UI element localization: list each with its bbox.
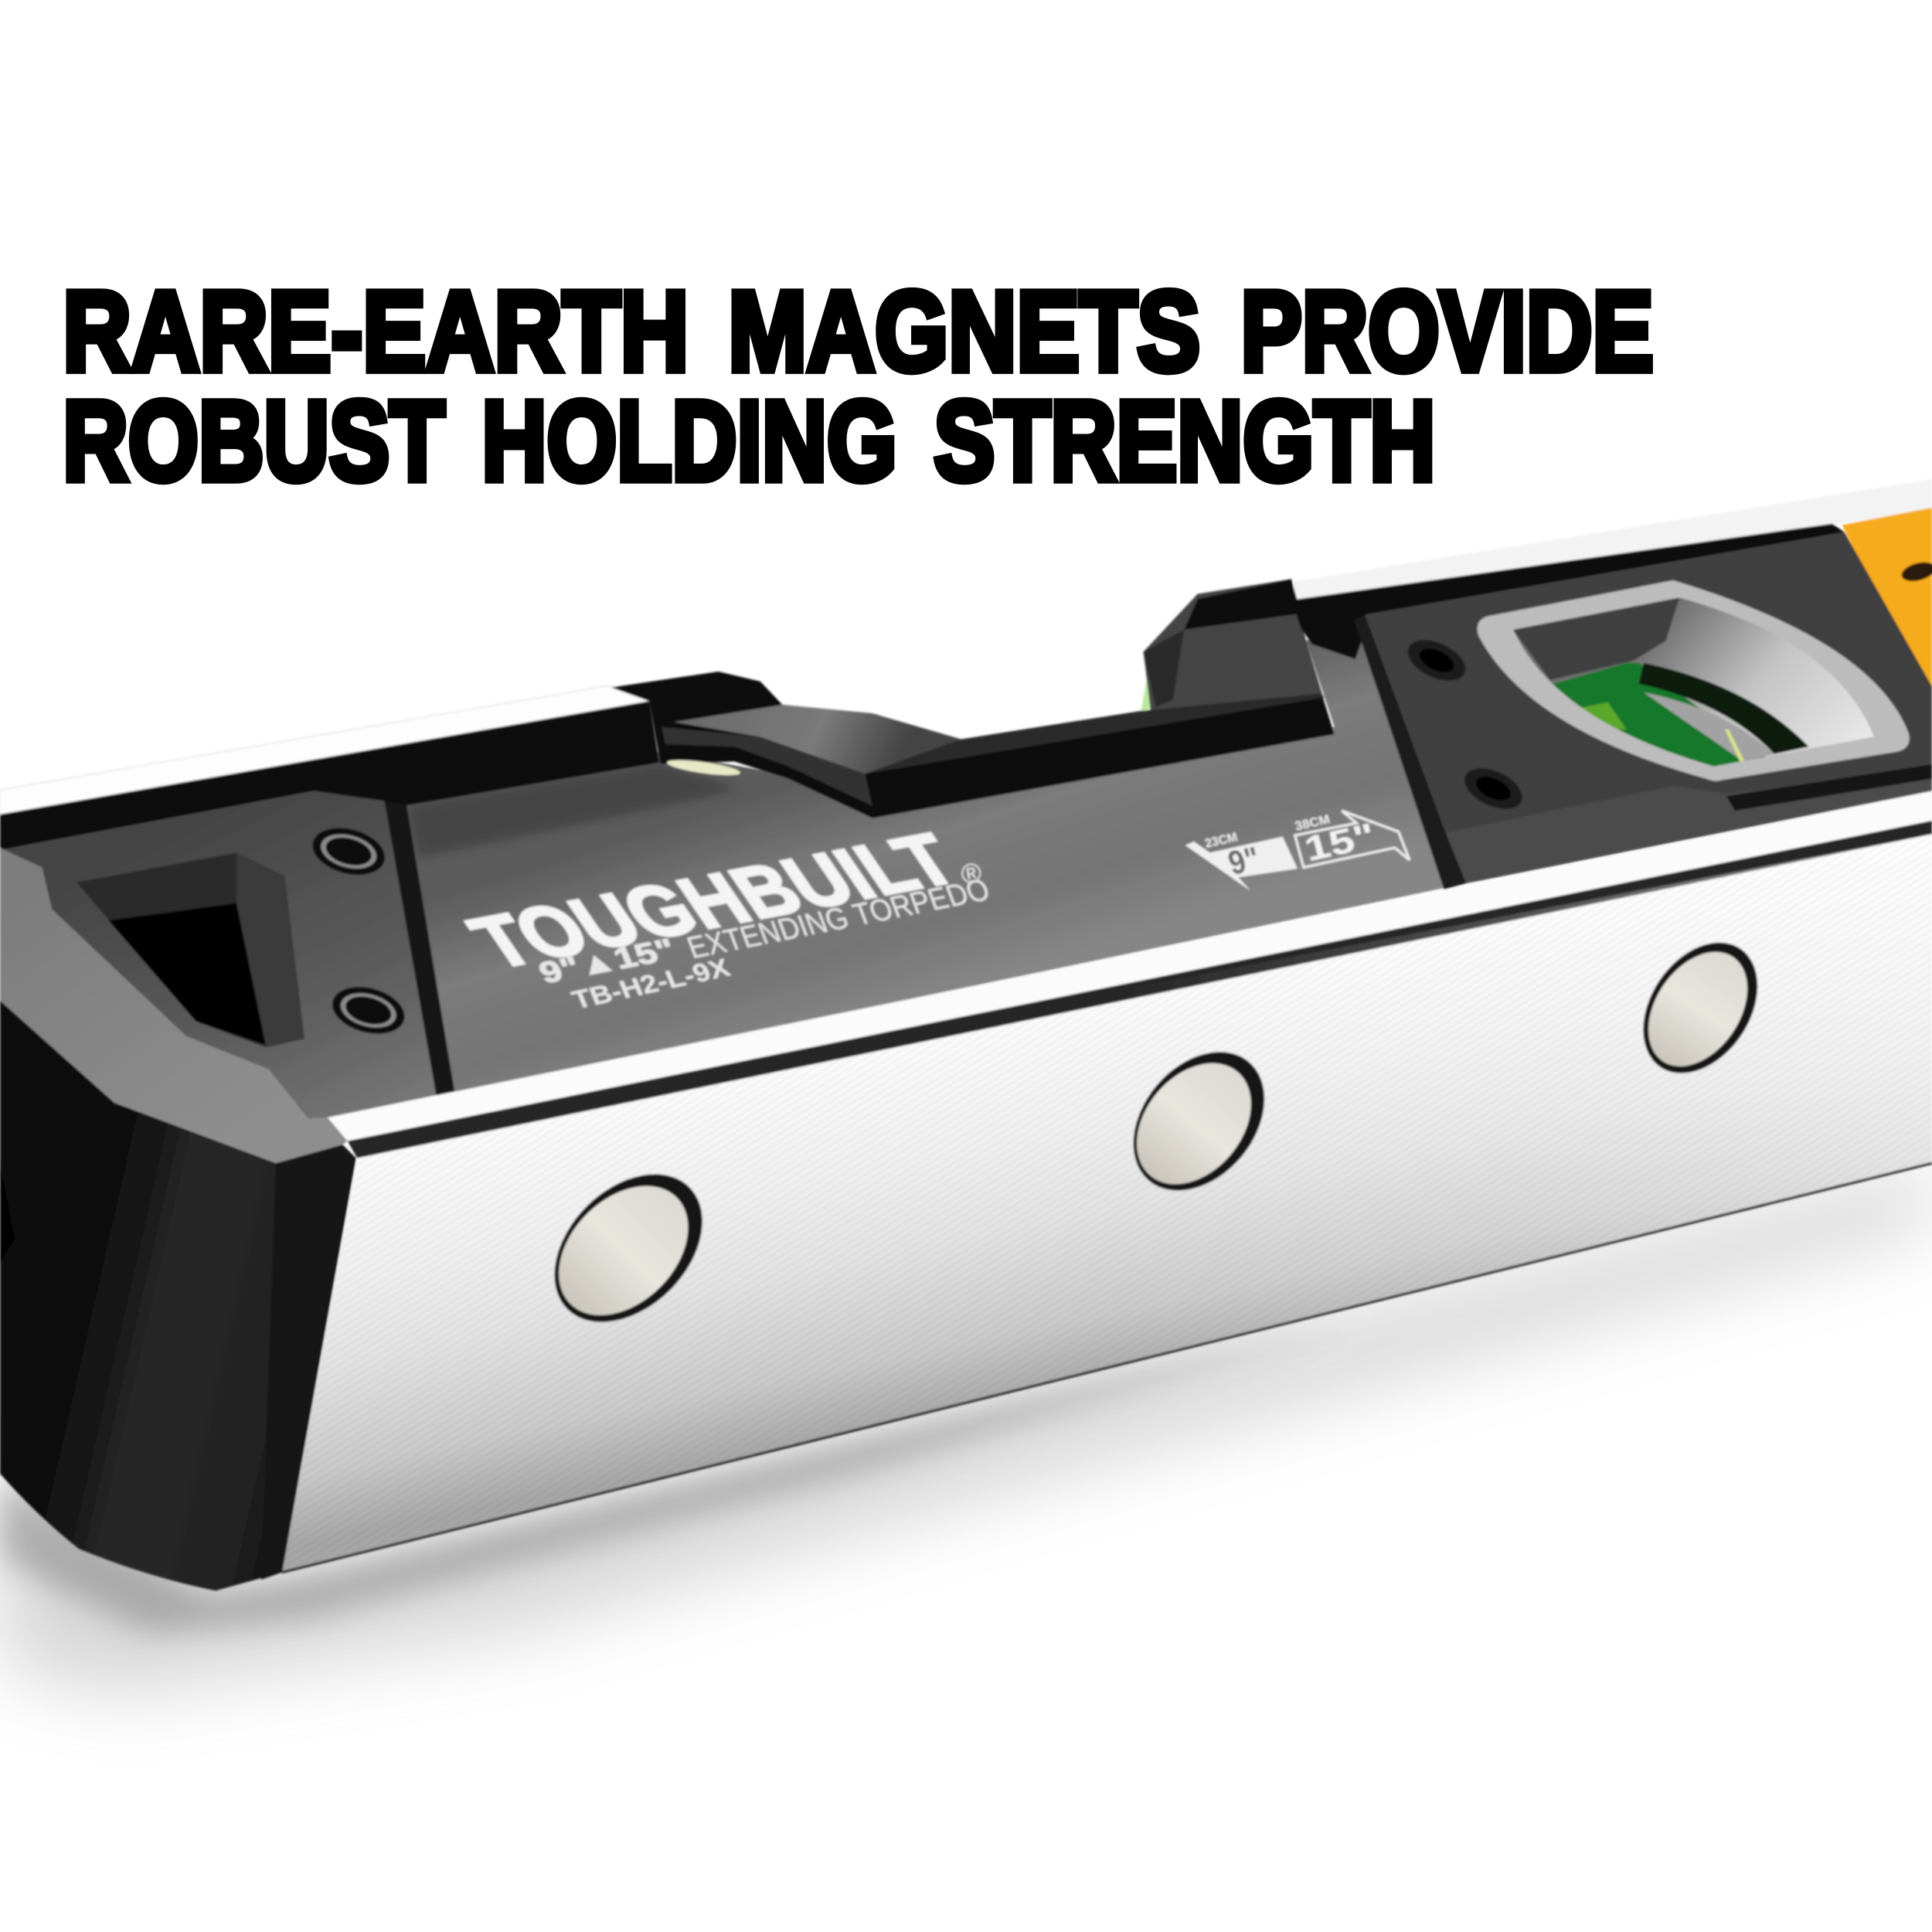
15 inch arrow: 38CM	[1294, 813, 1332, 834]
logo	[454, 818, 984, 983]
screw	[1401, 632, 1472, 689]
logo: TOUGHBUILT	[454, 818, 974, 983]
torpedo level	[0, 479, 1932, 1590]
extending bracket	[1141, 579, 1335, 734]
product description text: TB-H2-L-9X	[567, 953, 734, 1015]
screw	[327, 979, 410, 1041]
title: HOLDING	[481, 378, 897, 505]
vial window bezel	[1478, 580, 1910, 781]
title: STRENGTH	[934, 378, 1435, 505]
black groove stripe	[348, 821, 1932, 1158]
black end cap	[0, 1001, 356, 1590]
9 inch arrow	[1185, 831, 1298, 891]
machined aluminium face	[282, 834, 1932, 1572]
rail left: black	[0, 701, 659, 850]
deck plate	[404, 620, 1466, 1094]
deck upper shadow	[406, 763, 740, 858]
ground shadow	[0, 1165, 1932, 1694]
magnet 2	[1107, 1026, 1291, 1216]
screw	[1458, 760, 1529, 817]
end block	[0, 791, 454, 1163]
magnet 1	[526, 1145, 731, 1351]
screw	[308, 821, 390, 883]
title: RARE-EARTH	[63, 268, 689, 395]
9 inch arrow: 23CM	[1203, 831, 1239, 851]
product description text	[534, 872, 995, 1015]
top rail right: white edge	[1294, 479, 1932, 604]
15 inch arrow	[1294, 811, 1410, 869]
pocket	[77, 852, 304, 1047]
title: MAGNETS	[728, 268, 1200, 395]
title: PROVIDE	[1241, 268, 1654, 395]
yellow housing	[1842, 508, 1932, 709]
top rail left: white edge	[0, 685, 649, 815]
title: ROBUST	[63, 378, 445, 505]
9 inch arrow: 9"	[1224, 840, 1264, 882]
logo: ®	[958, 857, 984, 890]
vial window recess	[1513, 597, 1874, 774]
product description text: 9"▲15"	[534, 932, 680, 989]
product infographic	[0, 287, 1932, 1719]
product description text: EXTENDING TORPEDO	[682, 872, 995, 965]
green vial	[1553, 662, 1765, 768]
title	[63, 268, 1654, 505]
white chamfer stripe	[328, 791, 1932, 1141]
vial panel	[1354, 532, 1932, 889]
magnet 3	[1620, 921, 1781, 1095]
size icon: 9 inch to 15 inch arrows	[1185, 811, 1410, 891]
15 inch arrow: 15"	[1301, 816, 1379, 869]
lever clip	[611, 672, 1335, 818]
rail right: black	[1291, 524, 1845, 659]
